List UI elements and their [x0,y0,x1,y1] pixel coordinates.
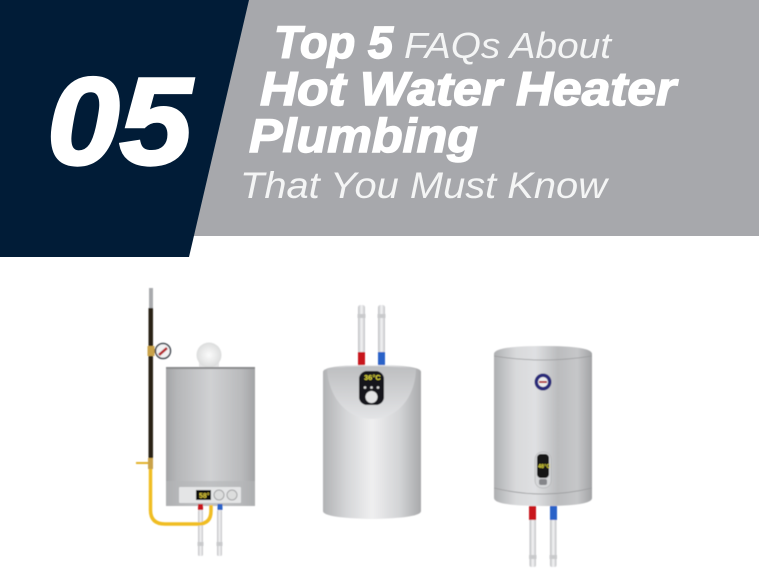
display [535,452,551,488]
title line 2: Hot Water Heater [260,62,679,115]
under-sink white heater [323,305,421,519]
title line 1 light: FAQs About [404,25,613,66]
dome [327,366,416,419]
number 05: 05 [47,53,194,191]
pipes [358,305,386,366]
display: 48°C [538,464,550,470]
control panel: 58° [199,492,210,500]
header grey band [185,0,759,236]
tank body [494,346,592,506]
pressure gauge [148,344,170,358]
wall-mounted tankless heater [136,288,255,556]
title [240,17,679,206]
water pipes [198,504,222,556]
gas valve [136,462,150,464]
vertical pipe [149,288,153,309]
heater body [166,367,255,506]
thermometer badge [534,374,552,390]
flue [199,354,219,368]
header navy panel [0,0,249,257]
title line 1 bold: Top 5 [274,17,394,68]
pipes [529,506,557,567]
title line 4: That You Must Know [240,165,609,206]
control unit: 36°C [364,373,381,382]
control unit [359,371,384,405]
body [323,365,421,519]
control panel [179,487,241,503]
title line 3: Plumbing [249,109,478,162]
cylindrical steel tank heater [494,346,592,567]
yellow gas pipe [150,460,211,524]
